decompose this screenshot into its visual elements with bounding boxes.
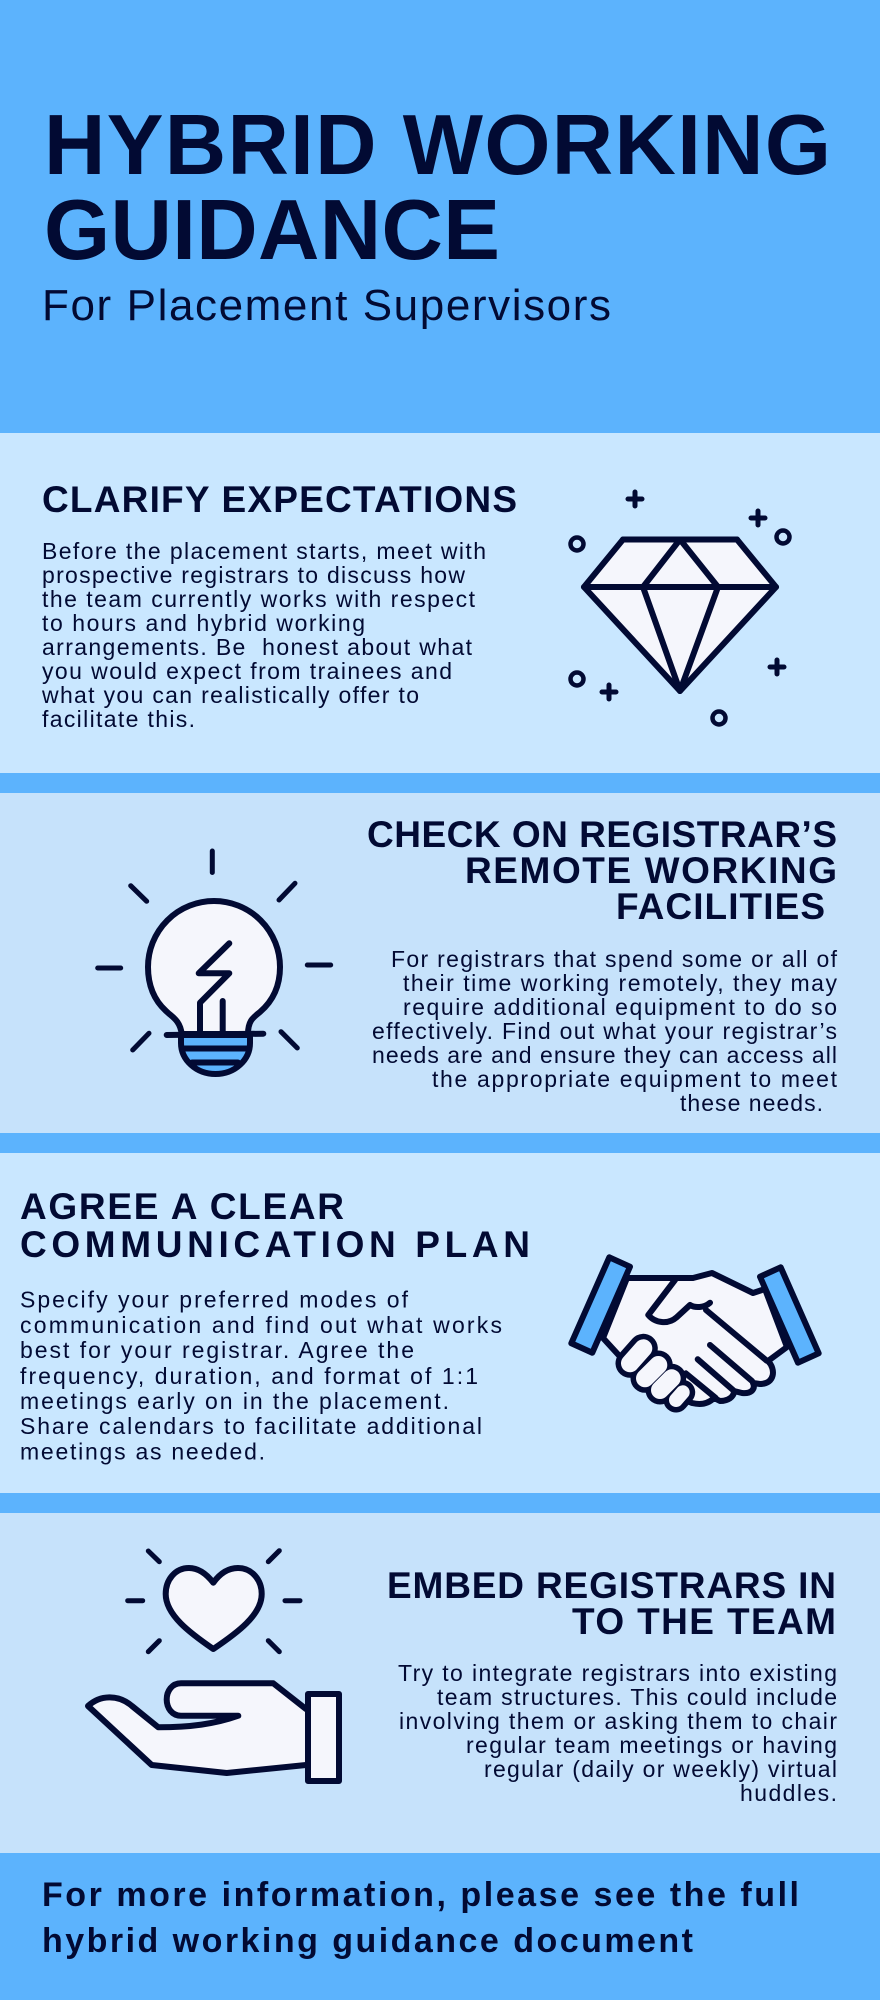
footer text: For more information, please see the full <box>42 1876 799 1914</box>
text block: remote working facilities: For registrars that spend some or all of <box>391 946 838 972</box>
text block: embed registrars <box>398 1660 837 1806</box>
text block: communication plan <box>20 1286 502 1464</box>
text block: remote working facilities: the appropriate equipment to meet <box>432 1066 838 1092</box>
title <box>44 98 831 278</box>
icon detail: left hand fingers <box>630 1348 683 1400</box>
text block: remote working facilities: effectively. Find out what your registrar’s <box>372 1018 837 1044</box>
text block: remote working facilities: needs are and ensure they can access all <box>372 1042 837 1068</box>
icon detail: light rays <box>98 851 331 1050</box>
text block: clarify expectations: to hours and hybrid working <box>42 610 365 636</box>
heading: check on registrar's remote working facilities: REMOTE WORKING <box>465 850 837 891</box>
icon detail: right cuff <box>760 1267 819 1363</box>
icon detail: sparkle circles <box>570 530 790 724</box>
text block: clarify expectations: prospective registrars to discuss how <box>42 562 465 588</box>
text block: communication plan: meetings as needed. <box>20 1438 265 1464</box>
panel: agree a clear communication plan <box>0 1153 880 1493</box>
panel: title header <box>0 0 880 433</box>
text block: communication plan: meetings early on in the placement. <box>20 1388 449 1414</box>
footer text <box>42 1876 799 1960</box>
text block: clarify expectations <box>41 538 486 732</box>
icon: diamond <box>570 492 790 724</box>
text block: clarify expectations: facilitate this. <box>42 706 195 732</box>
icon detail: open hand <box>88 1683 306 1773</box>
icon detail: heart rays <box>128 1551 300 1652</box>
text block: remote working facilities: these needs. <box>680 1090 823 1116</box>
text block: embed registrars: involving them or asking them to chair <box>399 1708 837 1734</box>
icon detail: heart <box>166 1568 262 1649</box>
heading: agree a clear communication plan <box>20 1186 530 1265</box>
text block: clarify expectations: the team currently works with respect <box>42 586 476 612</box>
icon detail: cuff <box>308 1694 339 1781</box>
panel: check on remote working facilities <box>0 793 880 1133</box>
text block: embed registrars: regular team meetings or having <box>466 1732 837 1758</box>
text block: remote working facilities <box>372 946 838 1116</box>
heading: embed registrars in to the team: EMBED REGISTRARS IN <box>387 1565 836 1606</box>
heading: agree a clear communication plan: AGREE A CLEAR <box>20 1186 344 1227</box>
text block: communication plan: frequency, duration, and format of 1:1 <box>20 1363 478 1389</box>
heading: check on registrar's remote working facilities <box>367 814 837 927</box>
heading: agree a clear communication plan: COMMUNICATION PLAN <box>20 1224 530 1265</box>
text block: communication plan: Share calendars to facilitate additional <box>20 1413 482 1439</box>
text block: communication plan: communication and find out what works <box>20 1312 502 1338</box>
text block: embed registrars: team structures. This could include <box>437 1684 837 1710</box>
icon: handshake <box>571 1257 819 1404</box>
title: HYBRID WORKING <box>44 98 831 193</box>
icon detail: sparkle plus signs <box>602 492 784 699</box>
text block: embed registrars: huddles. <box>740 1780 837 1806</box>
icon: heart in open hand <box>88 1551 339 1781</box>
footer text: hybrid working guidance document <box>42 1922 693 1960</box>
text block: communication plan: best for your registrar. Agree the <box>20 1337 414 1363</box>
text block: embed registrars: regular (daily or weekly) virtual <box>484 1756 837 1782</box>
icon: light bulb <box>98 851 331 1074</box>
text block: remote working facilities: require additional equipment to do so <box>403 994 837 1020</box>
text block: communication plan: Specify your preferred modes of <box>20 1286 409 1312</box>
text block: clarify expectations: arrangements. Be honest about what <box>42 634 473 660</box>
subtitle: For Placement Supervisors <box>42 281 611 330</box>
text block: clarify expectations: you would expect from trainees and <box>42 658 452 684</box>
text block: clarify expectations: Before the placement starts, meet with <box>42 538 486 564</box>
panel: footer <box>0 1853 880 2000</box>
text block: clarify expectations: what you can realistically offer to <box>41 682 419 708</box>
heading: clarify expectations: CLARIFY EXPECTATIONS <box>42 479 517 520</box>
panel: clarify expectations <box>0 433 880 773</box>
heading: check on registrar's remote working facilities: CHECK ON REGISTRAR’S <box>367 814 837 855</box>
panel: embed registrars in to the team <box>0 1513 880 1853</box>
heading: embed registrars in to the team: TO THE TEAM <box>572 1601 836 1642</box>
title: GUIDANCE <box>44 183 500 278</box>
heading: check on registrar's remote working facilities: FACILITIES <box>616 886 825 927</box>
text block: remote working facilities: their time working remotely, they may <box>403 970 838 996</box>
icon detail: left cuff <box>571 1257 630 1353</box>
heading: embed registrars in to the team <box>387 1565 836 1642</box>
text block: embed registrars: Try to integrate registrars into existing <box>398 1660 837 1686</box>
